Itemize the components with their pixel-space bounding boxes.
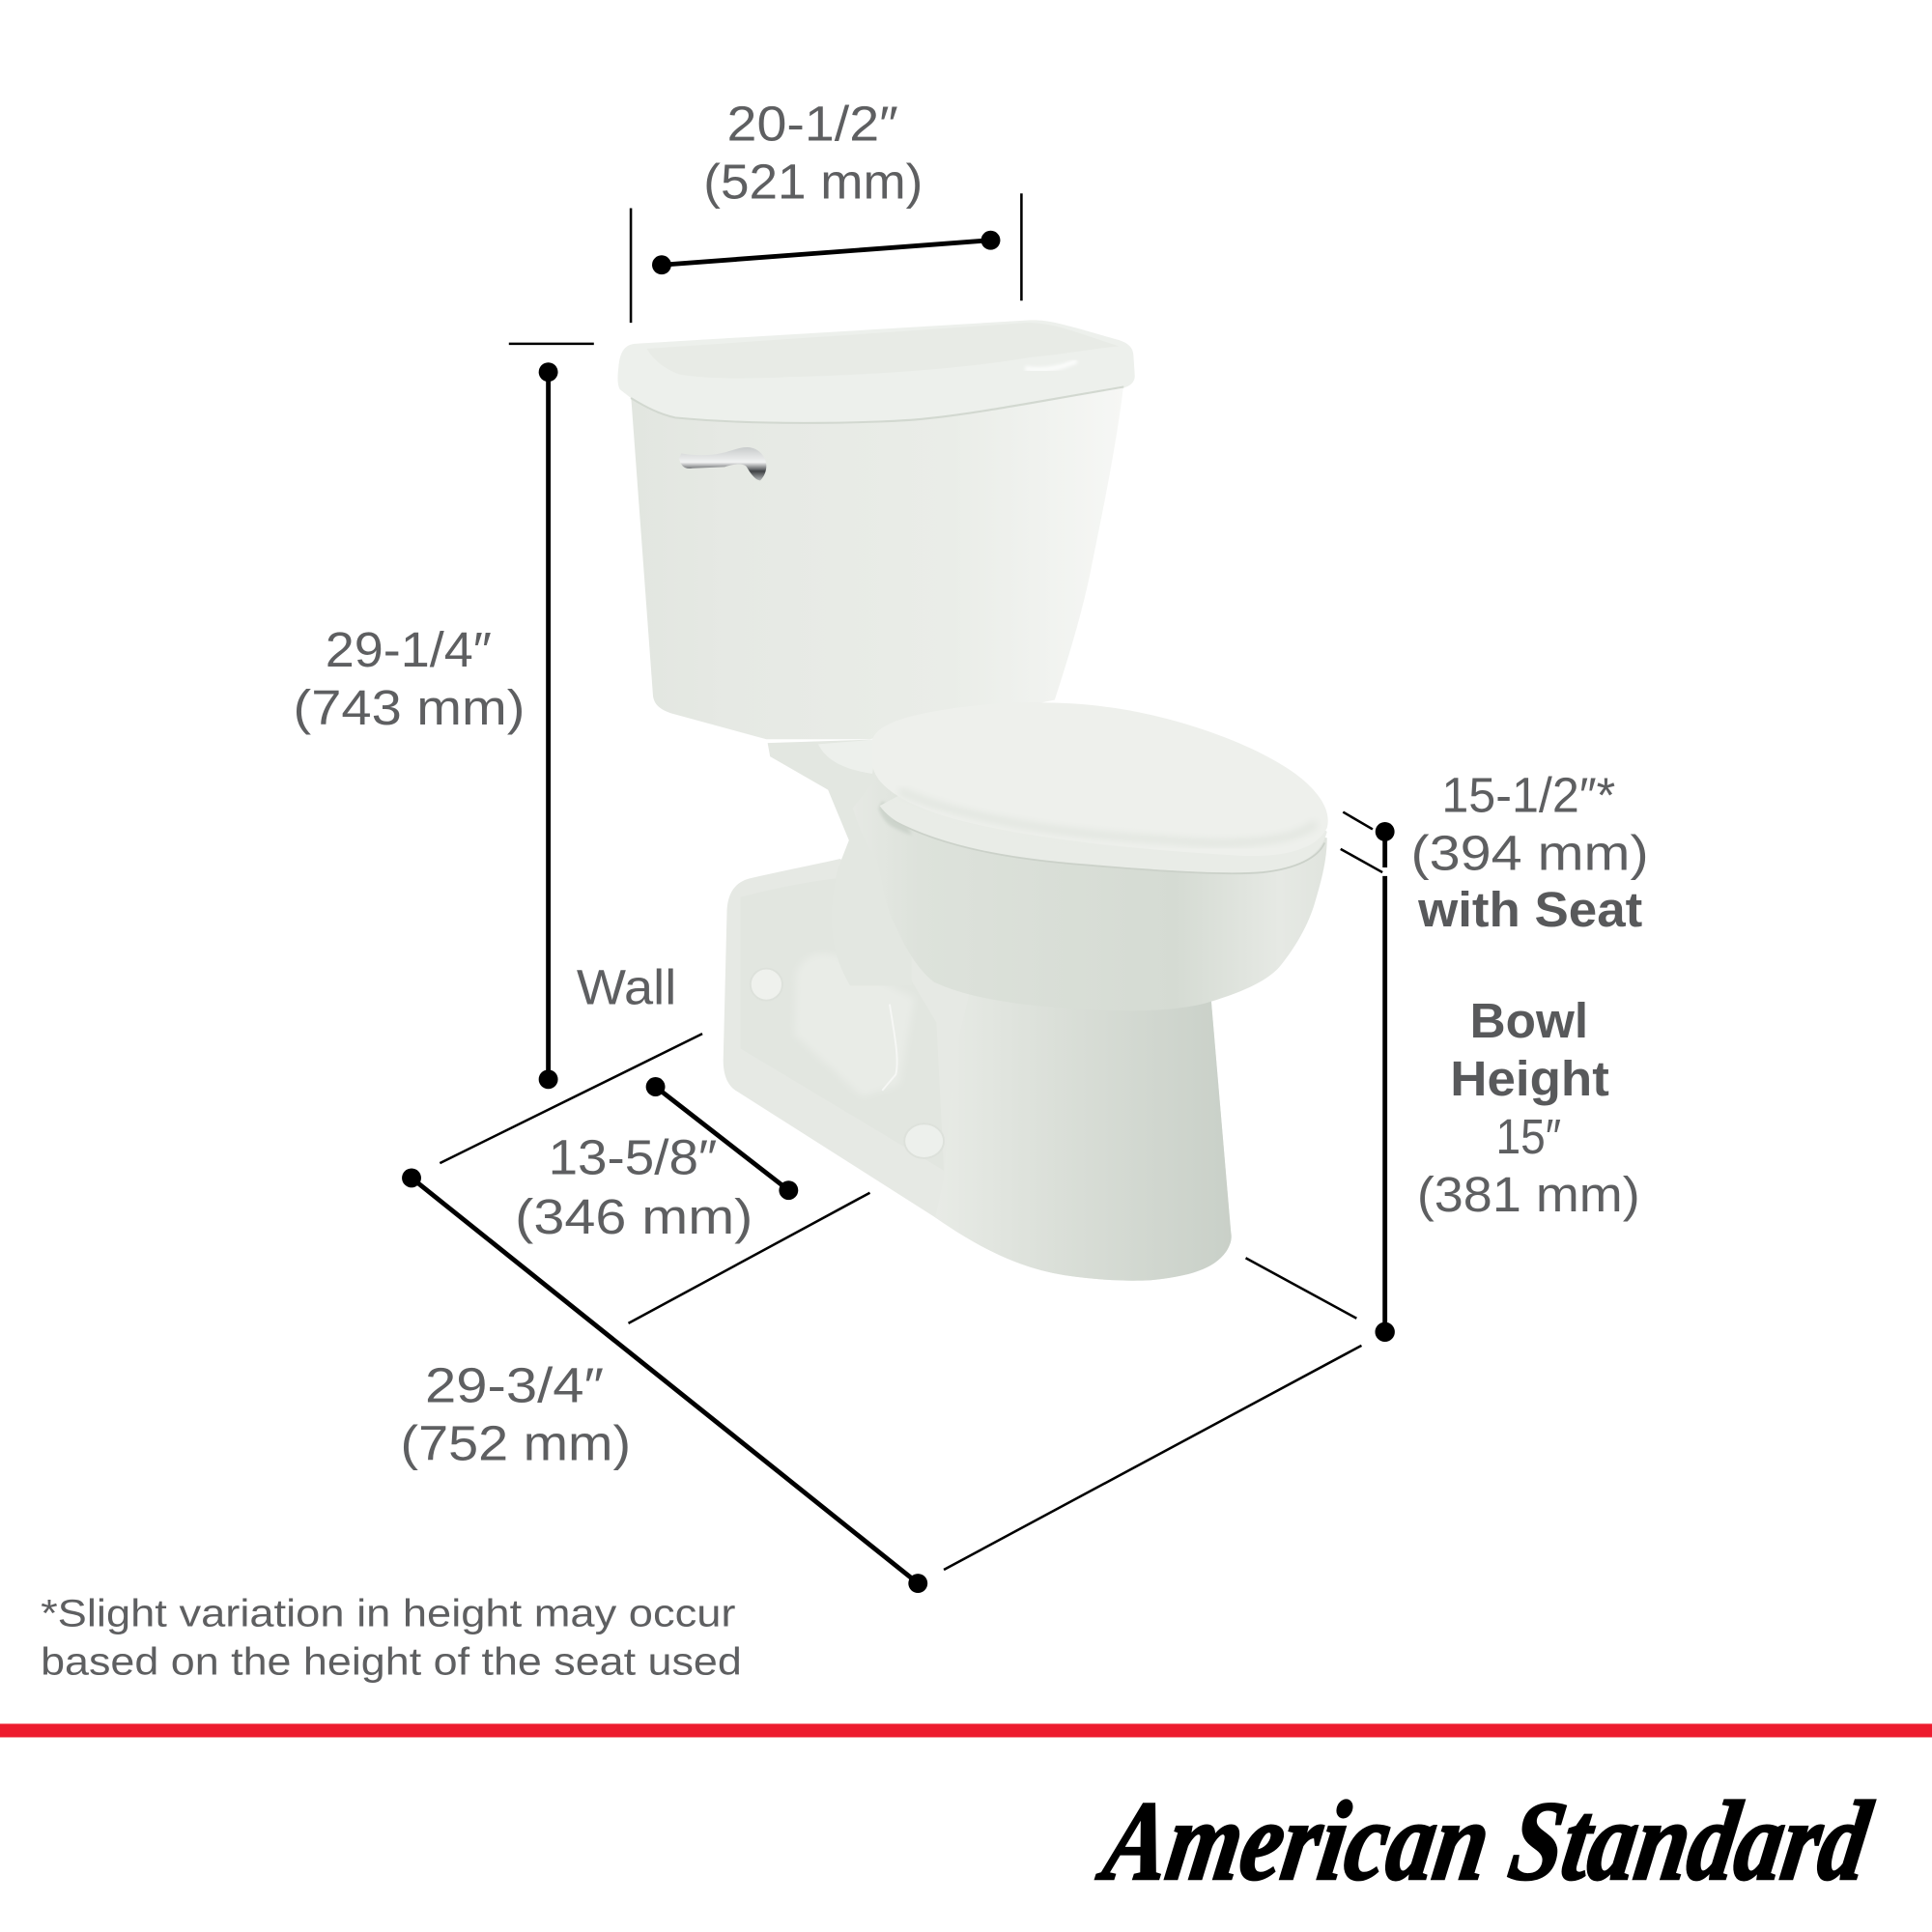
lid highlight <box>1025 361 1077 370</box>
seat height label <box>1410 768 1649 937</box>
bowl height label: 15″ <box>1495 1109 1561 1164</box>
tank body <box>631 384 1123 739</box>
width label <box>703 96 923 209</box>
neck <box>768 739 912 985</box>
seat lid shading <box>899 791 1316 843</box>
depth label: 29-3/4″ <box>425 1358 604 1413</box>
left bolt cap <box>751 969 782 1001</box>
seat height label: with Seat <box>1417 882 1642 937</box>
bowl height label: (381 mm) <box>1417 1167 1640 1222</box>
seat ring edge <box>894 820 1324 873</box>
toilet rear base <box>724 859 1232 1281</box>
depth label: (752 mm) <box>401 1415 631 1470</box>
trap highlight line <box>882 1005 897 1091</box>
bowl height label <box>1417 993 1640 1222</box>
toilet illustration <box>617 320 1328 1281</box>
overall height label: 29-1/4″ <box>326 622 492 677</box>
depth label <box>401 1358 631 1470</box>
tank lid <box>617 320 1135 424</box>
bowl <box>853 764 1327 1010</box>
bowl height label: Bowl <box>1470 993 1588 1048</box>
lid top panel <box>647 323 1119 379</box>
width label: 20-1/2″ <box>727 96 898 151</box>
seat height label: (394 mm) <box>1410 826 1649 881</box>
bowl height dimension line <box>1246 812 1395 1342</box>
flush pipe flange <box>818 739 877 774</box>
seat shadow gap <box>878 801 912 836</box>
flush handle <box>679 447 766 480</box>
lid seam <box>631 387 1123 423</box>
pedestal <box>935 992 1232 1281</box>
bowl height label: Height <box>1450 1051 1609 1106</box>
overall height label: (743 mm) <box>294 680 525 735</box>
footnote <box>41 1593 742 1683</box>
overall height dimension line <box>509 344 594 1089</box>
rough-in label: 13-5/8″ <box>549 1130 717 1185</box>
width label: (521 mm) <box>703 154 923 209</box>
base inner recess <box>741 877 944 1171</box>
footnote: based on the height of the seat used <box>41 1640 742 1683</box>
footnote: *Slight variation in height may occur <box>41 1593 735 1635</box>
overall height label <box>294 622 525 735</box>
wall label: Wall <box>577 960 676 1015</box>
rough-in dimension line <box>440 1034 870 1323</box>
red divider bar <box>0 1723 1932 1737</box>
rough-in label <box>515 1130 753 1244</box>
depth dimension line <box>402 1168 1361 1593</box>
front bolt cap <box>904 1123 944 1158</box>
seat height label: 15-1/2″* <box>1441 768 1615 823</box>
seat lid <box>872 702 1328 856</box>
rough-in label: (346 mm) <box>515 1189 753 1244</box>
base drain bulge <box>795 954 914 1096</box>
seat ring <box>880 788 1327 873</box>
width dimension line <box>631 193 1021 323</box>
